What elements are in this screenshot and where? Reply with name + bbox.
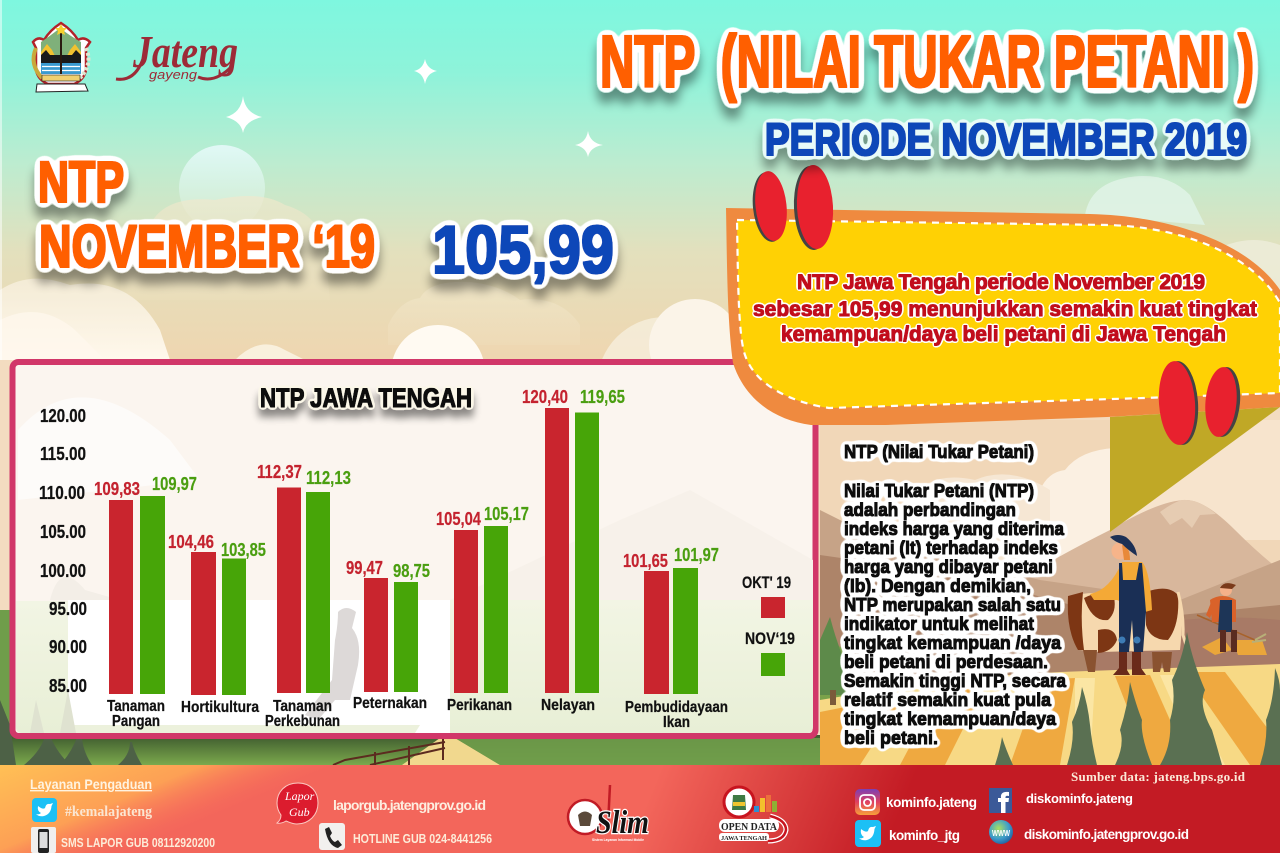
category labels: Tanaman — [273, 698, 332, 715]
icon: mobile phone — [31, 827, 56, 853]
lower grass — [0, 735, 830, 765]
bubble text: sebesar 105,99 menunjukkan semakin kuat tingkat — [753, 298, 1257, 321]
conifer trees — [995, 632, 1280, 765]
y axis labels — [39, 406, 87, 696]
category labels: Ikan — [663, 714, 690, 731]
logo: Jateng Gayeng: gayeng — [149, 67, 198, 82]
logo: Slim: Slim — [596, 805, 649, 841]
logo: Jateng Gayeng: Jateng — [132, 26, 238, 77]
y axis labels: 120.00 — [40, 406, 86, 426]
y axis labels: 105.00 — [40, 522, 86, 542]
silhouette farmer — [305, 608, 359, 720]
left trees — [0, 700, 142, 765]
bars November — [140, 412, 698, 695]
right landscape scene — [820, 420, 1280, 765]
logo: Lapor Gub: Lapor — [284, 789, 315, 803]
category labels: Nelayan — [541, 697, 595, 714]
quotation mark bottom — [1156, 360, 1243, 446]
values November: 103,85 — [221, 539, 266, 560]
bubble inner — [737, 220, 1280, 408]
y axis labels: 110.00 — [39, 483, 85, 503]
category labels: Pembudidayaan — [625, 699, 728, 716]
logo: Open Data: OPEN DATA — [721, 821, 777, 833]
category labels: Hortikultura — [181, 699, 259, 716]
explanation text block: adalah perbandingan — [844, 499, 1016, 520]
values November: 105,17 — [484, 503, 529, 524]
bubble body — [726, 208, 1280, 425]
facebook handle: diskominfo.jateng — [1026, 791, 1133, 806]
logo: Lapor Gub — [277, 783, 318, 824]
icon: twitter — [32, 798, 57, 822]
sparkles — [226, 59, 603, 157]
footer bar — [0, 765, 1280, 853]
values November: 112,13 — [306, 467, 351, 488]
small farmer — [1197, 583, 1267, 655]
explanation text block — [844, 441, 1067, 748]
speech bubble — [726, 164, 1280, 532]
fence — [333, 735, 445, 765]
bubble text: NTP Jawa Tengah periode November 2019 — [797, 271, 1205, 294]
y axis labels: 100.00 — [40, 561, 86, 581]
y axis labels: 90.00 — [49, 637, 87, 657]
bars October — [109, 408, 669, 695]
sky cloud shapes — [820, 420, 1280, 620]
explanation text block: Semakin tinggi NTP, secara — [844, 670, 1067, 691]
background clouds — [0, 145, 1280, 453]
explanation text block: beli petani. — [844, 727, 938, 748]
logo: Slim — [568, 785, 649, 842]
hotline: HOTLINE GUB 024-8441256 — [353, 832, 492, 846]
icon: handset — [319, 823, 345, 850]
values November: 119,65 — [580, 386, 625, 407]
background sky — [0, 0, 1280, 360]
explanation text block: tingkat kemampuan /daya — [844, 632, 1062, 653]
NTP value: 105,99 — [432, 212, 614, 288]
panel frame — [12, 362, 816, 736]
explanation text block: petani (It) terhadap indeks — [844, 537, 1058, 558]
field — [820, 664, 1280, 765]
grass left of field — [820, 640, 850, 700]
explanation text block: beli petani di perdesaan. — [844, 651, 1048, 672]
values November: 101,97 — [674, 544, 719, 565]
values November: 98,75 — [393, 560, 430, 581]
icon: instagram — [855, 789, 880, 815]
main farmer — [1090, 535, 1152, 675]
bubble text: kemampuan/daya beli petani di Jawa Tengah — [781, 323, 1226, 346]
values October: 99,47 — [346, 557, 383, 578]
values October — [94, 386, 668, 578]
category labels — [107, 695, 728, 731]
values October: 104,46 — [168, 531, 214, 552]
explanation text block: indeks harga yang diterima — [844, 518, 1065, 539]
category labels: Perkebunan — [265, 713, 340, 730]
legend: OKT' 19 — [742, 573, 791, 592]
category labels: Tanaman — [107, 698, 165, 715]
explanation text block: tingkat kemampuan/daya — [844, 708, 1057, 729]
Lapor url: laporgub.jatengprov.go.id — [333, 797, 486, 813]
icon: twitter 2 — [855, 820, 881, 847]
values November: 109,97 — [152, 473, 197, 494]
panel faded landscape — [16, 397, 813, 733]
category labels: Perikanan — [447, 697, 512, 714]
mid hills — [820, 510, 1280, 690]
y axis labels: 85.00 — [49, 676, 87, 696]
logo: Jateng Gayeng — [116, 26, 238, 82]
sand path — [402, 738, 500, 765]
left edge strip — [0, 0, 2, 360]
quotation mark top — [749, 164, 835, 251]
complaint heading: Layanan Pengaduan — [30, 776, 152, 792]
values October: 109,83 — [94, 478, 140, 499]
tree left — [820, 617, 846, 695]
y axis labels: 115.00 — [40, 444, 86, 464]
values November — [152, 386, 719, 581]
y axis labels: 95.00 — [49, 599, 87, 619]
icon: www globe: WWW — [992, 829, 1010, 838]
cow — [1068, 589, 1186, 672]
explanation text block: Nilai Tukar Petani (NTP) — [844, 480, 1034, 501]
values October: 105,04 — [436, 508, 482, 529]
logo: Central Java crest — [33, 23, 90, 92]
hashtag: #kemalajateng — [65, 804, 152, 820]
explanation text block: indikator untuk melihat — [844, 613, 1034, 634]
values October: 101,65 — [623, 550, 668, 571]
explanation text block: (Ib). Dengan demikian, — [844, 575, 1031, 596]
chart panel — [12, 362, 816, 736]
category labels: Pangan — [112, 713, 160, 730]
left-edge green — [0, 610, 16, 765]
icon: facebook — [989, 788, 1012, 813]
website: diskominfo.jatengprov.go.id — [1024, 827, 1189, 842]
NTP heading left: NOVEMBER ‘19 — [39, 213, 375, 280]
explanation text block: NTP (Nilai Tukar Petani) — [844, 441, 1034, 462]
values October: 112,37 — [257, 461, 302, 482]
logo: Slim: Sistem Layanan Informasi Mobile — [592, 837, 645, 842]
logo: Lapor Gub: Gub — [289, 805, 310, 819]
data source: Sumber data: jateng.bps.go.id — [1071, 769, 1246, 784]
landscape behind lower content — [0, 360, 1280, 765]
mountain — [960, 500, 1280, 660]
explanation text block: NTP merupakan salah satu — [844, 594, 1061, 615]
legend: NOV‘19 — [745, 629, 795, 648]
explanation text block: harga yang dibayar petani — [844, 556, 1053, 577]
NTP heading left: NTP — [38, 150, 124, 215]
twitter handle: kominfo_jtg — [889, 828, 960, 843]
bubble tail — [1110, 407, 1280, 532]
NTP heading left — [38, 150, 375, 280]
instagram handle: kominfo.jateng — [886, 795, 977, 810]
SMS number: SMS LAPOR GUB 08112920200 — [61, 836, 215, 850]
logo: Open Data — [719, 787, 786, 842]
bubble text — [753, 271, 1257, 346]
chart title: NTP JAWA TENGAH — [260, 383, 472, 413]
logo: Open Data: JAWA TENGAH — [721, 835, 767, 842]
icon: www globe — [989, 820, 1013, 844]
legend — [742, 573, 795, 676]
category labels: Peternakan — [353, 695, 427, 712]
values October: 120,40 — [522, 386, 568, 407]
explanation text block: relatif semakin kuat pula — [844, 689, 1052, 710]
